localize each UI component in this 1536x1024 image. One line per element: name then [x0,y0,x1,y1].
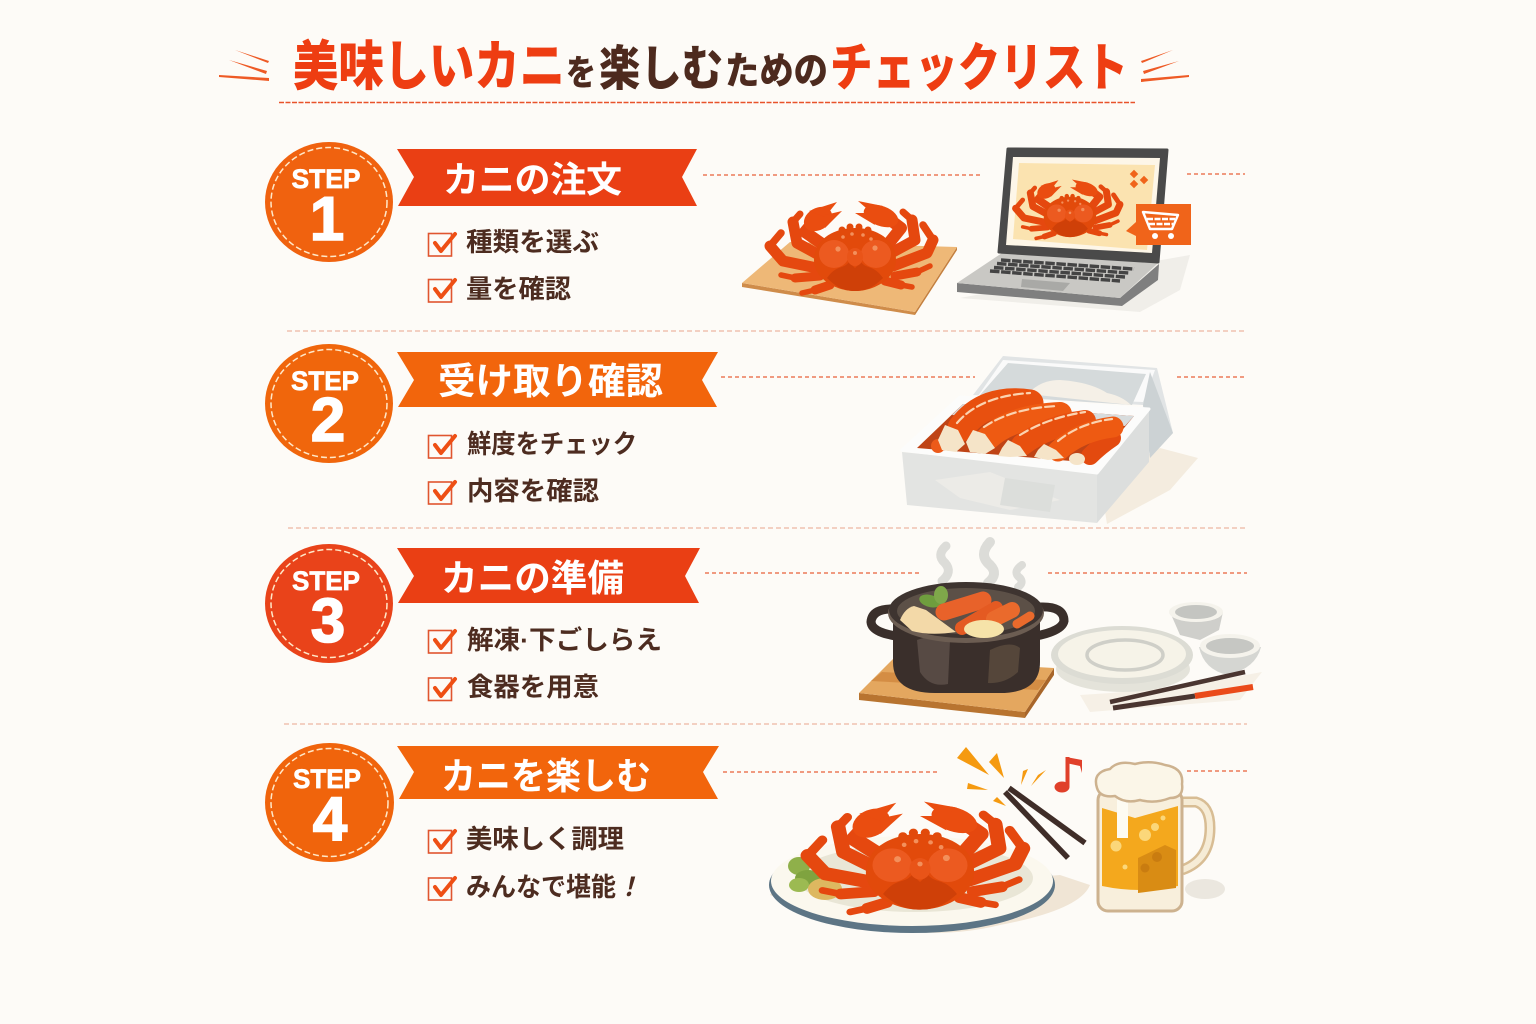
step 2 [265,344,718,506]
icon: music note [1054,757,1082,792]
title rays left [219,50,269,81]
step 1 checklist: 種類を選ぶ [466,227,599,257]
step 1 badge: 1 [310,185,344,254]
step 4 ribbon heading [397,746,719,799]
title [293,37,1128,98]
illustration: beer mug [1096,762,1225,911]
step 2 checklist: 内容を確認 [467,476,599,506]
title: 楽しむ [599,43,723,96]
step 1 ribbon heading: カニの注文 [443,159,622,200]
step 3 ribbon heading: カニの準備 [441,558,624,599]
title: チェックリスト [830,40,1128,98]
step 3 ribbon heading [397,548,700,603]
step 3 checklist: 食器を用意 [467,672,599,702]
step 4 ribbon heading: カニを楽しむ [441,756,651,797]
title: ための [725,51,828,93]
title: を [566,54,596,93]
step 2 badge: 2 [311,386,345,455]
step 3 badge [265,544,393,663]
step 2 badge [265,344,393,463]
step 2 checklist: 鮮度をチェック [467,429,637,459]
step 1 badge [265,142,393,262]
step 1 [265,142,697,304]
icon: sparks [957,747,1046,806]
icon: shopping cart tag [1126,204,1191,245]
illustration: plates, cups and chopsticks [1051,602,1262,712]
title rays right [1141,50,1189,82]
step 4 badge [265,743,394,862]
step 2 ribbon heading: 受け取り確認 [438,361,663,402]
icon: chopsticks [1005,788,1085,858]
step 2 badge: STEP [291,366,359,396]
step 1 checklist [428,227,599,304]
step 3 badge: 3 [311,587,345,656]
step 4 checklist [428,824,641,902]
step 1 badge: STEP [292,164,360,194]
step 3 checklist: 解凍·下ごしらえ [467,625,662,655]
illustration: steaming pot on board [859,542,1064,718]
illustration: crab on wooden board [742,200,957,315]
illustration: laptop with crab and cart [957,149,1191,312]
step 4 badge: STEP [293,764,361,794]
illustration: crab on plate [769,801,1090,933]
step 4 [265,743,719,902]
title: 美味しいカニ [293,37,565,97]
step 1 ribbon heading [397,149,697,206]
step 3 checklist [428,625,662,702]
step 4 badge: 4 [313,785,348,854]
step 3 badge: STEP [292,566,360,596]
step 2 ribbon heading [397,352,718,407]
step 1 checklist: 量を確認 [466,274,571,304]
step 2 checklist [428,429,637,506]
step 4 checklist: 美味しく調理 [466,824,624,854]
garnish [788,857,842,900]
illustration: styrofoam box with crab legs [902,356,1198,524]
step 4 checklist: みんなで堪能！ [466,872,641,902]
step 3 [265,544,700,702]
